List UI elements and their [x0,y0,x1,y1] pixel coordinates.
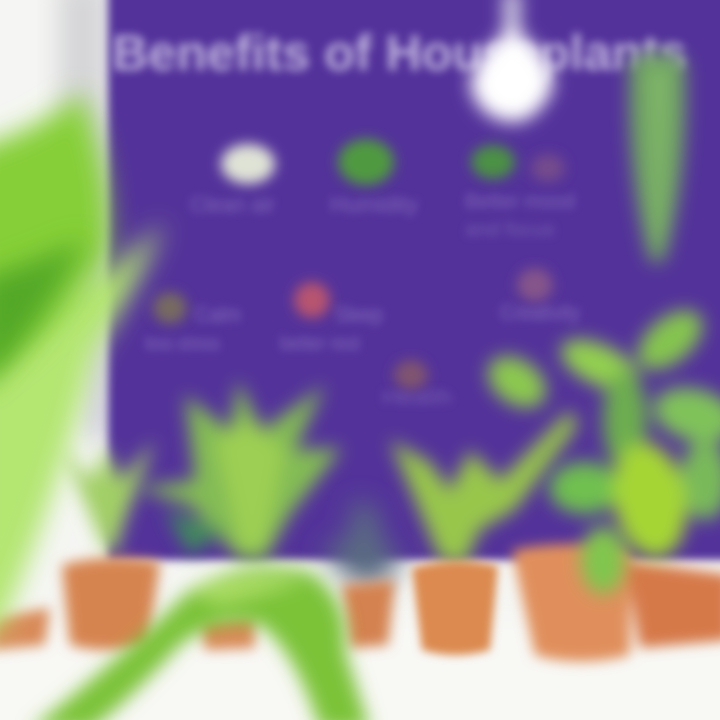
label: less stress [145,333,220,355]
benefit: row two, item two [280,282,383,355]
pot [62,558,160,650]
icon: green circle [338,139,394,185]
label: Humidity [330,192,418,217]
foreground leaf: bottom arch [30,566,370,720]
pot [342,580,395,648]
leaves [60,440,155,555]
label: better rest [280,333,360,355]
title: Benefits of Houseplants [112,25,687,81]
shelf [0,620,720,720]
benefit: row one, item three [465,145,575,241]
benefit: row two, item three [500,268,580,325]
plant: far left pot [0,608,50,650]
icon: mauve mark [517,268,553,302]
icon: brown mark [394,360,428,390]
benefit: row two, item one [145,292,241,355]
plant: small left pot [60,440,160,650]
plant: large centre-left succulent [135,380,342,560]
icon: red mark [294,282,330,318]
icon: olive mark [153,292,187,324]
panel: purple poster [108,0,720,560]
benefit: row three [382,360,452,409]
foreground leaf: large left [0,92,165,640]
leaves [390,410,578,565]
pot [412,561,498,655]
label: and focus [465,219,555,241]
label: Creativity [500,300,580,325]
icon: hanging green plant [629,52,686,262]
leaf: dark lower edge [0,240,85,390]
label: Health [382,387,452,409]
leaves [478,299,720,594]
label [280,302,383,355]
label: Sleep [335,302,383,327]
pots [512,544,720,662]
plant: small dark plant [320,500,405,648]
label: Clean air [190,192,275,217]
icon: white circle [221,144,275,184]
benefit: row one, item two [330,139,418,217]
icon: hanging white pot [470,0,553,122]
label [465,191,575,241]
label: Better mood [465,191,575,213]
plant: centre pot [390,410,578,655]
label: Calm [195,302,241,327]
leaf: bright upper blade [0,92,109,390]
label [145,302,241,355]
left wall shading [58,0,110,440]
pot: centre-left hidden [200,615,255,650]
icon: green and mauve marks [471,145,565,182]
leaf: pale lower blade [0,222,165,640]
plant: right large pots [478,299,720,662]
benefit: row one, item one [190,144,275,217]
